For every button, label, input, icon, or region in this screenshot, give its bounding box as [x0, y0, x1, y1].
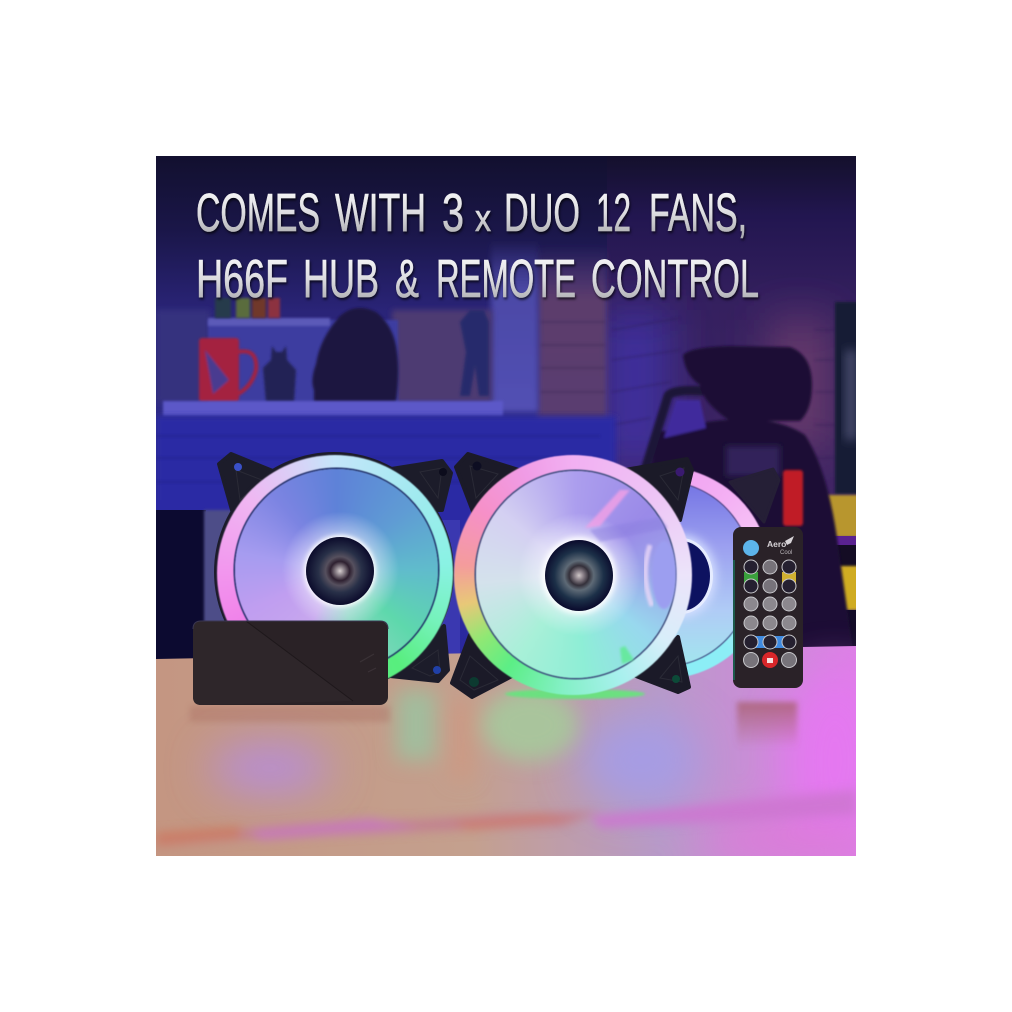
fan 2 hub: [545, 540, 613, 611]
Batman figure: [263, 346, 296, 402]
remote shadow on table: [737, 702, 797, 748]
small shelf with wall: [208, 320, 398, 404]
yellow lit desk: [828, 493, 856, 536]
title line 1: COMES: [196, 183, 320, 243]
title line 2: REMOTE: [436, 249, 576, 309]
fan 1 hub: [306, 537, 374, 605]
fan 1 light ring: [217, 455, 453, 691]
remote buttons: [744, 560, 796, 668]
brick lower wall: [156, 416, 616, 510]
fan 2 blades face: [476, 471, 675, 678]
lock button: [762, 652, 778, 668]
gaming chair: [640, 346, 853, 650]
red chair part: [783, 470, 803, 526]
table: [156, 646, 856, 856]
fan 1 blades face: [235, 469, 438, 671]
monitor: [835, 302, 860, 494]
right brick wall: [607, 199, 856, 610]
window frame: [491, 240, 538, 412]
AeroCool logo: Aero: [767, 539, 786, 549]
title line 1: x: [475, 198, 491, 240]
Darth Vader helmet: [312, 308, 398, 402]
title line 1: DUO: [504, 183, 580, 243]
remote colour bands: [744, 572, 758, 586]
remote control: Cool: [780, 550, 792, 556]
action figure: [460, 310, 489, 396]
fan glow on table edge: [505, 689, 645, 699]
brick wall behind shelf: [392, 310, 492, 403]
red mug: [199, 338, 256, 402]
title line 1: FANS,: [649, 183, 747, 243]
fan 2 light ring: [454, 455, 692, 695]
power button: [743, 540, 759, 556]
brick column: [536, 252, 610, 418]
books on shelf: [215, 298, 280, 318]
right wall bricks: [613, 322, 669, 424]
back wall: [156, 156, 607, 654]
fan 3 ring: [556, 467, 770, 679]
hub shadow on table: [190, 706, 390, 722]
title line 1: 3: [442, 183, 464, 243]
title line 1: WITH: [335, 183, 426, 243]
title line 1: 12: [596, 183, 631, 243]
main shelf: [163, 401, 503, 416]
photo background: room and table: [156, 156, 856, 856]
title line 2: &: [395, 249, 419, 309]
title line 2: HUB: [303, 249, 379, 309]
title line 2: CONTROL: [591, 249, 759, 309]
dark cabinet lower left: [156, 510, 206, 660]
table light reflections: [210, 670, 885, 864]
fan 3 face: [575, 482, 752, 666]
fan 3 hub: [652, 541, 710, 611]
title line 2: H66F: [196, 249, 288, 309]
